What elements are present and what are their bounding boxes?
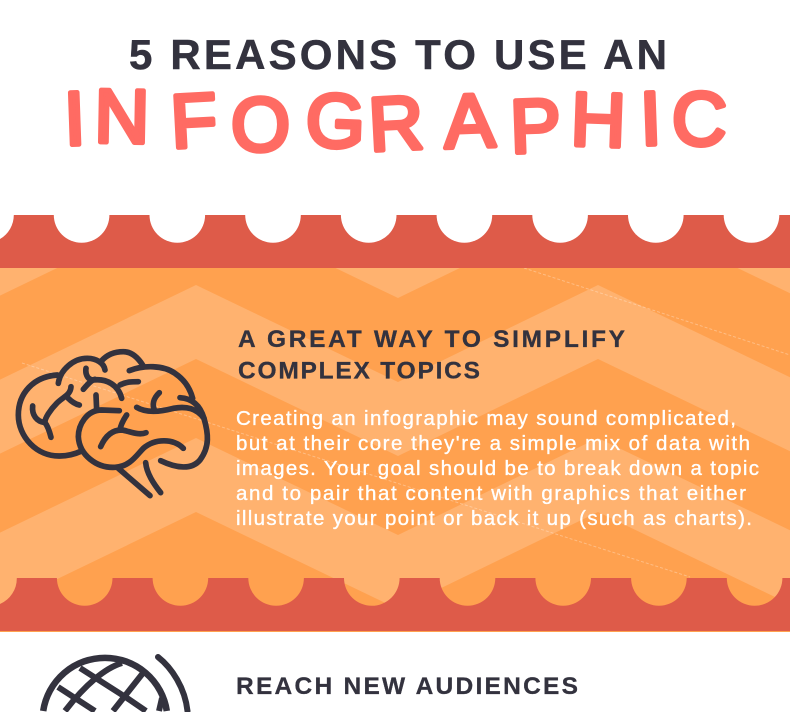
title: infographic: INFOGRAPHIC <box>63 74 728 170</box>
title: 5 reasons to use an: 5 REASONS TO USE AN <box>129 31 667 78</box>
body text: illustrate your point or back it up (such as charts). <box>236 507 752 530</box>
icon: brain <box>18 352 207 496</box>
chevron pattern <box>0 268 790 604</box>
body text: Creating an infographic may sound complicated, <box>236 407 736 430</box>
body text: images. Your goal should be to break down a topic <box>236 457 759 480</box>
heading: a great way to simplify complex topics: COMPLEX TOPICS <box>238 358 480 384</box>
heading: a great way to simplify complex topics <box>238 326 625 384</box>
bottom scalloped band <box>0 578 790 631</box>
panel: reach new audiences <box>43 657 578 711</box>
panel: simplify complex topics <box>0 215 790 632</box>
body text: and to pair that content with graphics that either <box>236 482 746 505</box>
icon: globe <box>43 657 188 711</box>
heading: reach new audiences: REACH NEW AUDIENCES <box>236 673 578 700</box>
top scalloped band <box>0 187 790 268</box>
body text: but at their core they're a simple mix of data with <box>236 432 750 455</box>
panel background <box>0 268 790 632</box>
body text <box>236 407 759 530</box>
heading: a great way to simplify complex topics: A GREAT WAY TO SIMPLIFY <box>238 326 625 353</box>
